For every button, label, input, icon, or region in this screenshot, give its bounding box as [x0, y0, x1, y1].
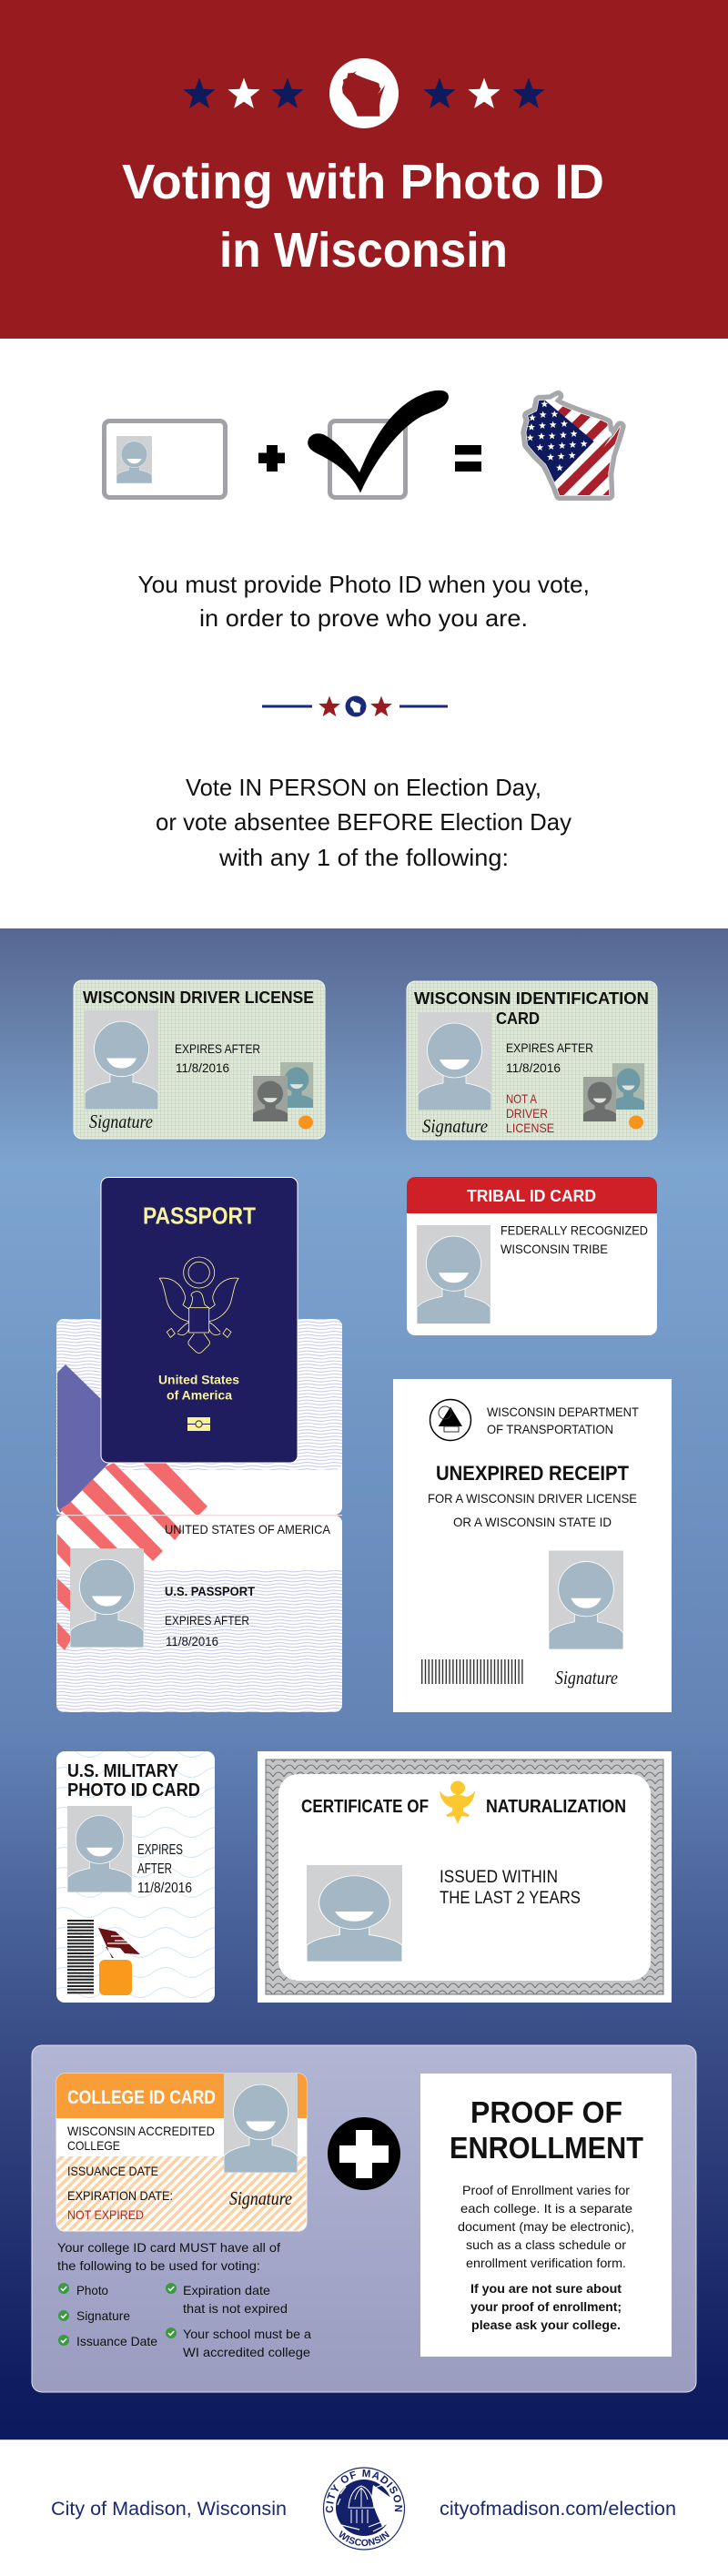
card: passport cover: PASSPORT: [143, 1202, 256, 1229]
card: unexpired receipt: OR A WISCONSIN STATE ID: [453, 1515, 612, 1529]
card: Wisconsin identification card: [407, 981, 657, 1140]
checklist: Signature: [76, 2308, 130, 2323]
title: [122, 155, 604, 278]
text block: how to vote: [156, 774, 571, 871]
card: tribal ID: [407, 1177, 657, 1335]
card: college ID: EXPIRATION DATE:: [67, 2188, 173, 2203]
icon: city of Madison seal: CITY OF MADISON: [326, 2469, 402, 2512]
passport stripes: [57, 1463, 207, 1650]
card: proof of enrollment: your proof of enrollment;: [470, 2299, 622, 2314]
panel: accepted ID background: [0, 928, 728, 2439]
card: proof of enrollment: If you are not sure about: [470, 2281, 622, 2296]
icon: city of Madison seal: [322, 2467, 406, 2551]
text block: must provide photo ID: in order to prove who you are.: [199, 604, 528, 632]
icon: gold eagle: [440, 1780, 475, 1824]
card: Wisconsin identification card: NOT A: [506, 1091, 538, 1106]
panel: footer: [0, 2439, 728, 2551]
card: college ID: COLLEGE ID CARD: [67, 2087, 216, 2108]
card: proof of enrollment: enrollment verification form.: [466, 2256, 626, 2270]
checklist: Issuance Date: [76, 2334, 157, 2348]
card: U.S. military photo ID: EXPIRES: [137, 1842, 183, 1858]
card: certificate of naturalization: [258, 1751, 672, 2003]
checklist: Your school must be a: [183, 2327, 311, 2341]
icon: department of transportation logo: [430, 1400, 471, 1440]
text block: college ID requirements: the following to be used for voting:: [57, 2258, 260, 2273]
card: U.S. military photo ID: [56, 1751, 215, 2003]
card: Wisconsin identification card: CARD: [496, 1009, 540, 1028]
text block: college ID requirements: Your college ID card MUST have all of: [57, 2240, 280, 2255]
card: Wisconsin driver license: Signature: [89, 1111, 153, 1132]
icon: ID card: [104, 421, 226, 497]
card: passport open pages: 11/8/2016: [166, 1634, 218, 1648]
card: proof of enrollment: [420, 2074, 672, 2357]
barcode: [421, 1659, 525, 1684]
card: unexpired receipt: UNEXPIRED RECEIPT: [436, 1462, 630, 1485]
icon: small flag: [98, 1928, 140, 1958]
card: college ID: NOT EXPIRED: [67, 2207, 144, 2222]
icon: checkbox with check mark: [308, 390, 449, 497]
card: proof of enrollment: each college. It is a separate: [460, 2201, 632, 2216]
card: passport cover: [101, 1178, 298, 1463]
card: college ID: Signature: [229, 2187, 292, 2209]
card: Wisconsin driver license: EXPIRES AFTER: [175, 1041, 260, 1056]
card: Wisconsin identification card: LICENSE: [506, 1121, 554, 1135]
text block: college ID requirements: [57, 2240, 280, 2273]
card: certificate of naturalization: ISSUED WITHIN: [440, 1868, 558, 1887]
text block: how to vote: Vote IN PERSON on Election Day,: [186, 774, 541, 801]
card: proof of enrollment: please ask your college.: [471, 2317, 621, 2332]
checklist: that is not expired: [183, 2301, 288, 2316]
footer: city name: City of Madison, Wisconsin: [51, 2499, 287, 2520]
card: proof of enrollment: PROOF OF: [470, 2095, 622, 2129]
card: Wisconsin driver license: WISCONSIN DRIVER LICENSE: [83, 989, 314, 1007]
card: Wisconsin identification card: WISCONSIN IDENTIFICATION: [414, 989, 649, 1008]
icon: Wisconsin in circle: [329, 58, 399, 128]
text block: must provide photo ID: You must provide Photo ID when you vote,: [138, 571, 590, 598]
card: college ID: [56, 2074, 307, 2231]
card: passport cover: United States: [158, 1373, 239, 1387]
card: college ID: ISSUANCE DATE: [67, 2164, 158, 2178]
card: college ID: WISCONSIN ACCREDITED: [67, 2124, 215, 2138]
panel: equation photo ID plus vote equals Wisconsin: [102, 390, 626, 501]
card: Wisconsin identification card: EXPIRES AFTER: [506, 1040, 593, 1055]
card: U.S. military photo ID: U.S. MILITARY: [67, 1761, 179, 1781]
card: Wisconsin driver license: [74, 980, 325, 1139]
card: unexpired receipt: WISCONSIN DEPARTMENT: [487, 1405, 639, 1419]
panel: college ID plus proof of enrollment: [32, 2045, 696, 2392]
passport chevron: [57, 1364, 109, 1513]
card: passport open pages: UNITED STATES OF AMERICA: [165, 1522, 331, 1536]
card: certificate of naturalization: THE LAST 2 YEARS: [440, 1889, 581, 1908]
checklist: WI accredited college: [183, 2345, 310, 2359]
icon: row of stars: [183, 78, 545, 108]
card: proof of enrollment: ENROLLMENT: [450, 2131, 643, 2165]
card: Wisconsin driver license: 11/8/2016: [176, 1060, 229, 1075]
icon: plus sign: [258, 445, 285, 472]
card: U.S. military photo ID: 11/8/2016: [137, 1881, 192, 1896]
card: Wisconsin identification card: 11/8/2016: [506, 1060, 561, 1075]
card: unexpired receipt: Signature: [555, 1667, 618, 1689]
icon: city of Madison seal: WISCONSIN: [339, 2530, 389, 2547]
card: proof of enrollment: such as a class schedule or: [466, 2237, 626, 2252]
panel: header banner: [0, 0, 728, 339]
card: proof of enrollment: Proof of Enrollment varies for: [462, 2183, 630, 2197]
card: college ID: COLLEGE: [67, 2138, 120, 2153]
card: proof of enrollment: document (may be electronic),: [458, 2219, 634, 2234]
barcode: [67, 1920, 94, 1994]
icon: orange chip: [99, 1960, 132, 1995]
checklist: Expiration date: [183, 2283, 270, 2297]
card: certificate of naturalization: NATURALIZATION: [486, 1797, 626, 1817]
card: Wisconsin identification card: Signature: [422, 1115, 488, 1137]
title: in Wisconsin: [219, 223, 508, 278]
card: passport open pages: U.S. PASSPORT: [165, 1584, 255, 1598]
card: tribal ID: WISCONSIN TRIBE: [500, 1242, 608, 1256]
icon: equals sign: [455, 445, 481, 472]
checklist: Photo: [76, 2283, 108, 2297]
card: unexpired receipt: FOR A WISCONSIN DRIVER LICENSE: [428, 1491, 637, 1506]
card: tribal ID: FEDERALLY RECOGNIZED: [500, 1223, 648, 1238]
card: unexpired receipt: [393, 1379, 672, 1712]
title: Voting with Photo ID: [122, 155, 604, 209]
icon: Wisconsin flag map: [521, 390, 626, 501]
icon: plus in black circle: [328, 2117, 400, 2190]
text block: must provide photo ID: [138, 571, 590, 632]
checklist: [58, 2283, 311, 2359]
card: passport open pages: EXPIRES AFTER: [165, 1613, 249, 1628]
card: passport cover: of America: [167, 1388, 232, 1403]
card: unexpired receipt: OF TRANSPORTATION: [487, 1422, 613, 1436]
card: tribal ID: TRIBAL ID CARD: [467, 1187, 596, 1205]
text block: how to vote: with any 1 of the following:: [218, 844, 509, 871]
icon: eagle seal: [159, 1257, 238, 1353]
text block: how to vote: or vote absentee BEFORE Election Day: [156, 808, 571, 836]
card: U.S. military photo ID: AFTER: [137, 1861, 172, 1877]
card: passport open pages: [56, 1319, 342, 1712]
icon: star divider: [262, 695, 448, 717]
card: certificate of naturalization: CERTIFICATE OF: [301, 1797, 429, 1817]
icon: biometric chip: [187, 1417, 210, 1431]
footer: web address: cityofmadison.com/election: [440, 2499, 676, 2520]
card: Wisconsin identification card: DRIVER: [506, 1106, 548, 1121]
card: U.S. military photo ID: PHOTO ID CARD: [67, 1780, 200, 1800]
